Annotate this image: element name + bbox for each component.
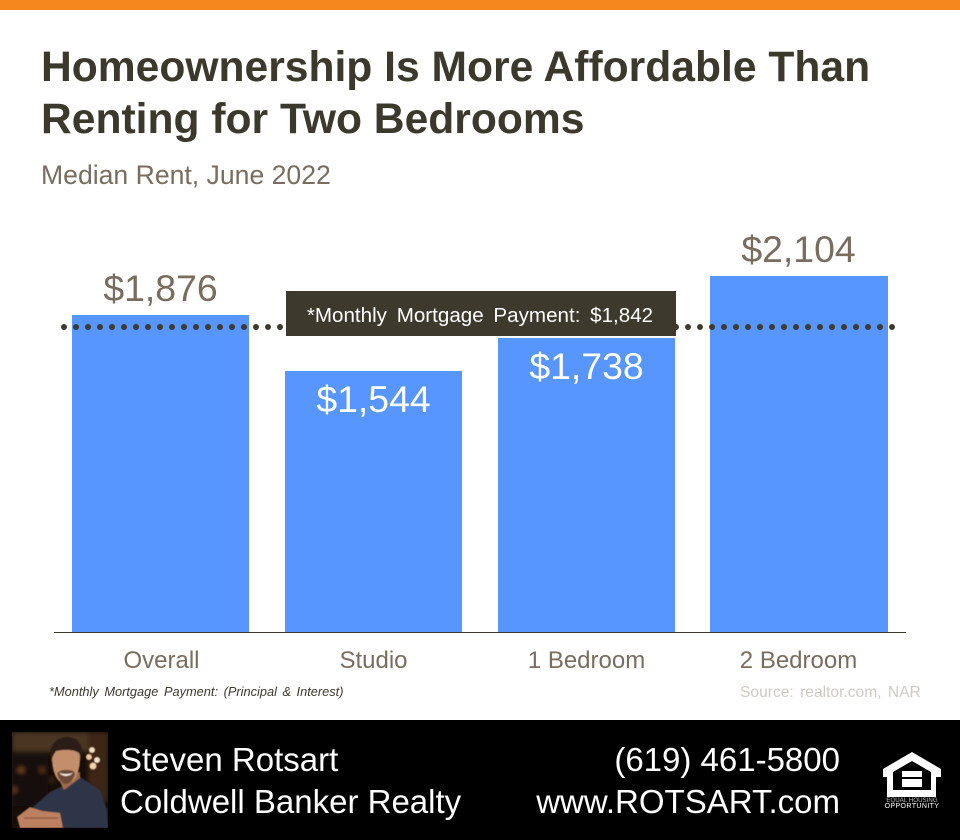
footer band xyxy=(0,720,960,840)
footnote: *Monthly Mortgage Payment: (Principal & Interest) xyxy=(49,684,344,699)
phone and website xyxy=(536,741,840,820)
title: Renting for Two Bedrooms xyxy=(41,95,584,143)
category: 2 Bedroom: 2 Bedroom xyxy=(740,647,857,674)
phone and website: www.ROTSART.com xyxy=(536,783,840,820)
category: Studio: Studio xyxy=(339,647,408,674)
value: Studio: $1,544 xyxy=(316,378,431,420)
title xyxy=(41,43,870,143)
agent name and company xyxy=(120,741,462,820)
title: Homeownership Is More Affordable Than xyxy=(41,43,870,91)
source: Source: realtor.com, NAR xyxy=(740,684,921,701)
subtitle: Median Rent, June 2022 xyxy=(41,160,331,190)
icon caption: OPPORTUNITY xyxy=(885,803,939,810)
category: 1 Bedroom: 1 Bedroom xyxy=(528,647,645,674)
agent photo xyxy=(12,732,108,828)
icon: equal housing opportunity xyxy=(883,752,941,810)
icon caption: EQUAL HOUSING xyxy=(886,797,938,804)
agent name and company: Steven Rotsart xyxy=(120,741,338,778)
value: 2 Bedroom: $2,104 xyxy=(741,228,856,270)
mortgage payment label: *Monthly Mortgage Payment: $1,842 xyxy=(307,304,653,327)
phone and website: (619) 461-5800 xyxy=(614,741,840,778)
icon: house xyxy=(883,752,941,797)
bar: Overall xyxy=(72,315,249,632)
bar: Studio xyxy=(285,371,462,632)
value: Overall: $1,876 xyxy=(103,267,218,309)
bar chart xyxy=(54,228,906,674)
category: Overall: Overall xyxy=(123,647,200,674)
baseline axis xyxy=(54,632,906,633)
agent name and company: Coldwell Banker Realty xyxy=(120,783,461,820)
value: 1 Bedroom: $1,738 xyxy=(529,345,644,387)
bar: 1 Bedroom xyxy=(498,338,675,632)
mortgage payment label xyxy=(286,291,676,336)
icon caption xyxy=(884,797,939,810)
dotted mortgage line xyxy=(61,324,895,330)
top orange band xyxy=(0,0,960,10)
bar: 2 Bedroom xyxy=(710,276,888,632)
